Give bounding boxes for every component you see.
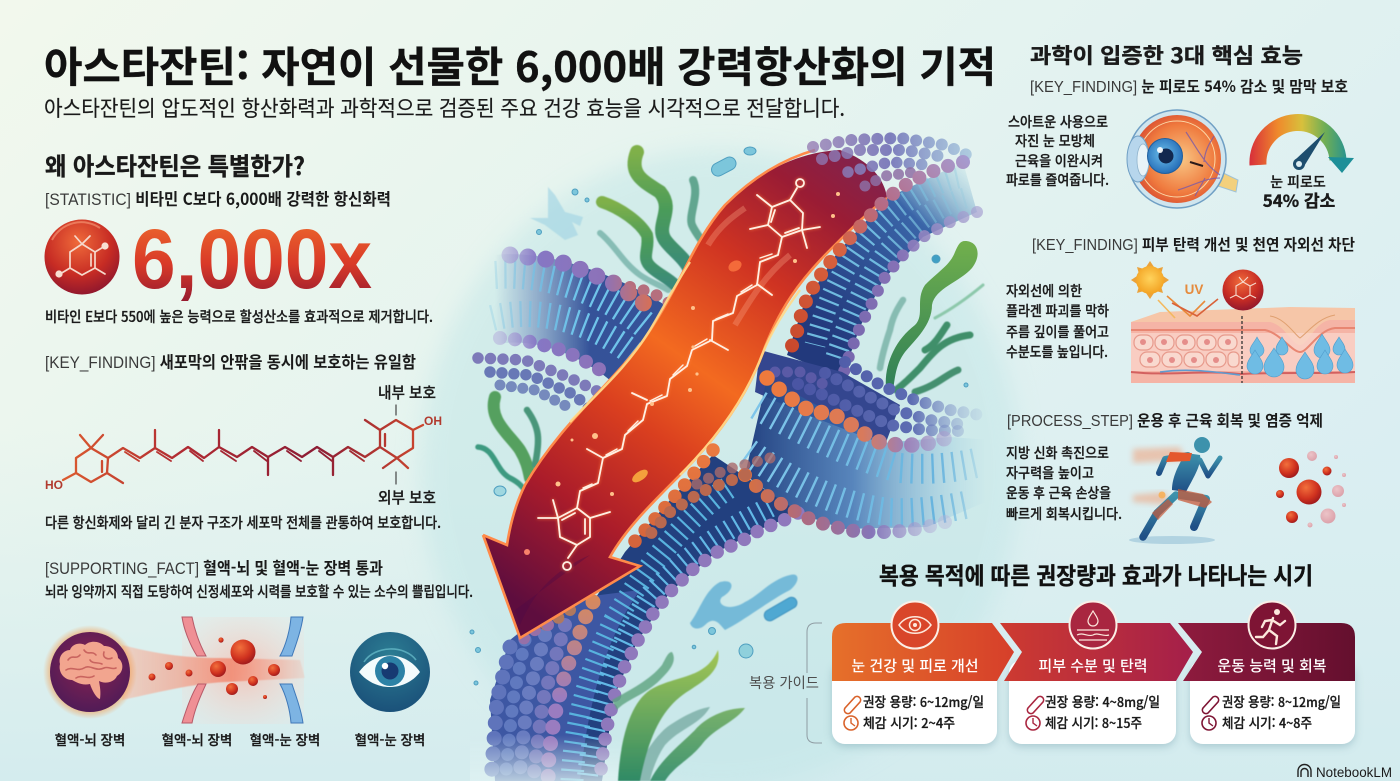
heading: three core effects: 과학이 입증한 3대 핵심 효능 bbox=[1030, 40, 1303, 70]
supporting fact note: 뇌라 잉약까지 직접 도탕하여 신정세포와 시력를 보호할 수 있는 소수의 쁠립입니다. bbox=[45, 581, 473, 602]
label: dosage guide with bracket: 복용 가이드 bbox=[749, 672, 819, 693]
chart: fatigue gauge bbox=[1258, 122, 1354, 173]
title: 아스타잔틴: 자연이 선물한 6,000배 강력항산화의 기적 bbox=[44, 34, 996, 95]
seaweed background bbox=[478, 152, 983, 492]
label: blood-brain barrier: 혈액-뇌 장벽 bbox=[55, 729, 125, 749]
statistic heading: [STATISTIC] 비타민 C보다 6,000배 강력한 항신화력 bbox=[45, 186, 391, 210]
eye effect text: 파로를 즐여줍니다. bbox=[1006, 170, 1109, 190]
label: UV: UV bbox=[1185, 282, 1203, 297]
skin cells bbox=[1134, 335, 1239, 367]
skin effect text: 자외선에 의한 bbox=[1006, 281, 1082, 301]
diagram: barrier crossing bbox=[122, 617, 305, 724]
finding: exercise heading: [PROCESS_STEP] 운용 후 근육 회복 및 염증 억제 bbox=[1007, 409, 1323, 431]
skin effect text: 주름 깊이를 풀어고 bbox=[1006, 322, 1109, 342]
illustration: skin cross section bbox=[1131, 307, 1355, 383]
label: OH: OH bbox=[424, 414, 442, 428]
exercise effect text: 빠르게 회복시킵니다. bbox=[1006, 504, 1122, 524]
illustration: anti-inflammatory cells bbox=[1276, 451, 1346, 528]
card: skin bbox=[1000, 602, 1193, 744]
top head cluster bbox=[813, 138, 967, 186]
panel: blood barrier bbox=[43, 555, 473, 749]
heading: why special: 왜 아스타잔틴은 특별한가? bbox=[45, 148, 305, 183]
eye effect text: 근육을 이완시켜 bbox=[1015, 151, 1103, 171]
eye effect text: 스아트운 사용으로 bbox=[1008, 112, 1108, 132]
membrane upper-right band bbox=[787, 162, 977, 378]
eye effect text bbox=[1006, 112, 1109, 190]
membrane lower-right band bbox=[745, 378, 990, 529]
arrow: UV rays bbox=[1158, 296, 1218, 318]
icon: sun bbox=[1131, 261, 1169, 299]
panel: why astaxanthin is special bbox=[44, 148, 433, 327]
exercise effect text: 운동 후 근육 손상을 bbox=[1006, 483, 1111, 503]
panel: proven effects bbox=[1006, 40, 1355, 544]
label: blood-eye barrier: 혈액-눈 장벽 bbox=[355, 729, 425, 749]
molecule inside arrow bbox=[538, 179, 820, 570]
card: exercise: 체감 시기: 4~8주 bbox=[1222, 712, 1312, 732]
key finding heading: [KEY_FINDING] 새포막의 안팎을 동시에 보호하는 유일함 bbox=[45, 349, 416, 373]
finding: skin heading: [KEY_FINDING] 피부 탄력 개선 및 천연 자외선 차단 bbox=[1032, 233, 1355, 255]
membrane lower band bbox=[470, 455, 800, 781]
icon: eye bbox=[350, 632, 430, 712]
finding: eye heading: [KEY_FINDING] 눈 피로도 54% 감소 및 맘막 보호 bbox=[1030, 75, 1348, 97]
seaweed: right leaf bbox=[886, 241, 978, 390]
water blobs bbox=[470, 147, 968, 685]
label: blood-brain barrier center: 혈액-뇌 장벽 bbox=[162, 729, 232, 749]
dark head cluster bbox=[775, 362, 980, 431]
logo: NotebookLM: NotebookLM bbox=[1316, 765, 1392, 780]
label: inner protection: 내부 보호 bbox=[378, 381, 436, 403]
icon: brain bbox=[43, 625, 137, 719]
label: HO: HO bbox=[45, 478, 63, 492]
card: eye health: 눈 건강 및 피로 개선 bbox=[851, 655, 979, 676]
card: eye health: 권장 용량: 6~12mg/일 bbox=[863, 691, 984, 711]
card: exercise: 권장 용량: 8~12mg/일 bbox=[1222, 691, 1341, 711]
membrane finding note: 다른 항신화제와 달리 긴 분자 구조가 세포막 전체를 관통하여 보호합니다. bbox=[45, 512, 441, 533]
membrane junction behind head cluster bbox=[755, 350, 900, 445]
label: dosage guide with bracket bbox=[749, 623, 822, 743]
eye effect text: 자진 눈 모방체 bbox=[1015, 131, 1095, 151]
skin effect text: 플라겐 파괴를 막하 bbox=[1006, 301, 1109, 321]
water drops bbox=[1247, 334, 1353, 379]
exercise effect text: 지방 신화 촉진으로 bbox=[1006, 443, 1109, 463]
skin effect text bbox=[1006, 281, 1109, 362]
membrane left band bbox=[478, 254, 672, 410]
exercise effect text: 자구력을 높이고 bbox=[1006, 463, 1094, 483]
skin effect text: 수분도를 높입니다. bbox=[1006, 342, 1108, 362]
statistic note: 비타인 E보다 550에 높은 능력으로 할성산소를 효과적으로 제거합니다. bbox=[45, 306, 433, 327]
card: eye health: 체감 시기: 2~4주 bbox=[863, 712, 955, 732]
card: skin: 피부 수분 및 탄력 bbox=[1038, 655, 1148, 676]
label: eye fatigue: 눈 피로도 bbox=[1270, 172, 1326, 192]
icon: anatomical eye bbox=[1127, 110, 1238, 208]
card: exercise bbox=[1178, 602, 1355, 744]
bubbles inside arrow bbox=[524, 192, 840, 555]
label: 54 percent reduction: 54% 감소 bbox=[1263, 187, 1335, 212]
orange head rows beside arrow bbox=[625, 450, 770, 552]
illustration: cell membrane with arrow bbox=[470, 138, 990, 781]
label: outer protection: 외부 보호 bbox=[378, 486, 436, 508]
label: blood-eye barrier center: 혈액-눈 장벽 bbox=[250, 729, 320, 749]
pale water creatures bbox=[530, 187, 799, 630]
card: skin: 권장 용량: 4~8mg/일 bbox=[1045, 691, 1160, 711]
illustration: runner bbox=[1129, 437, 1220, 544]
panel: dosage guide bbox=[749, 557, 1355, 744]
card: eye health bbox=[832, 602, 1014, 744]
seaweed foreground bbox=[612, 650, 745, 781]
membrane heads over arrow bbox=[625, 138, 980, 552]
card: exercise: 운동 능력 및 회복 bbox=[1217, 655, 1327, 676]
big number 6,000x: 6,000x bbox=[132, 212, 372, 306]
card: skin: 체감 시기: 8~15주 bbox=[1045, 712, 1142, 732]
arrow: astaxanthin molecule through membrane bbox=[483, 150, 887, 638]
icon: molecule badge bbox=[44, 220, 120, 294]
panel: membrane protection finding bbox=[45, 349, 442, 533]
supporting fact heading: [SUPPORTING_FACT] 혈액-뇌 및 혈액-눈 장벽 통과 bbox=[45, 555, 383, 579]
heading: dosage guide: 복용 목적에 따른 권장량과 효과가 나타나는 시기 bbox=[879, 557, 1313, 591]
subtitle: 아스타잔틴의 압도적인 항산화력과 과학적으로 검증된 주요 건강 효능을 시각적으로 전달합니다. bbox=[44, 92, 845, 123]
exercise effect text bbox=[1006, 443, 1122, 524]
chart: astaxanthin molecule bbox=[63, 405, 423, 484]
icon: molecule shield bbox=[1222, 270, 1264, 310]
